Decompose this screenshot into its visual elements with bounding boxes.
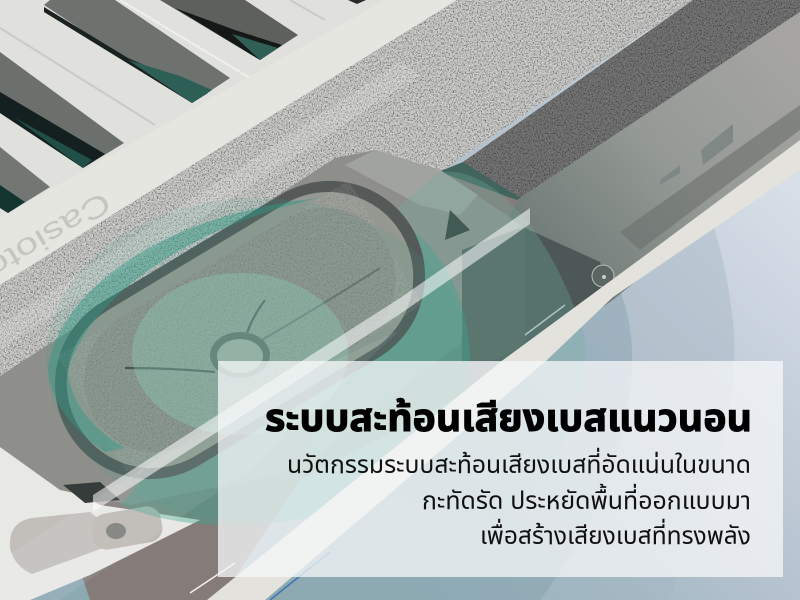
keyboard keys area <box>0 0 400 250</box>
body text <box>287 447 751 550</box>
teal corner behind frame <box>438 162 530 232</box>
key slot: small top-right slot <box>348 0 366 4</box>
white base plate <box>0 447 200 600</box>
vent: small <box>660 165 680 185</box>
vent: large <box>701 124 733 165</box>
frame notch <box>445 210 470 240</box>
body text: เพื่อสร้างเสียงเบสที่ทรงพลัง <box>480 518 751 550</box>
key slot: top-left slot <box>44 0 230 103</box>
sound ring: middle, behind driver <box>120 198 470 526</box>
screw <box>592 265 614 287</box>
housing right of speaker <box>455 12 800 372</box>
frame notch lower left <box>63 482 120 503</box>
ring: inner <box>132 273 348 435</box>
dark grille section <box>463 0 800 198</box>
cream front edge band <box>190 140 800 600</box>
key slot: left slot <box>0 52 124 168</box>
ring: middle tint <box>46 198 470 522</box>
frame side wall <box>462 226 525 362</box>
body text: กะทัดรัด ประหยัดพื้นที่ออกแบบมา <box>422 483 751 515</box>
ring: middle, left edge <box>48 198 320 452</box>
mount hole <box>89 504 165 552</box>
sound ring: outer, behind driver <box>300 172 586 520</box>
rubber ring <box>35 160 445 500</box>
key slot: bottom-left slot <box>0 147 50 213</box>
cone <box>57 181 423 479</box>
key slot: top-middle slot <box>160 0 298 60</box>
body text: นวัตกรรมระบบสะท้อนเสียงเบสที่อัดแน่นในขนาด <box>287 447 751 479</box>
rounded foot <box>10 512 125 574</box>
body base behind speaker <box>50 172 613 600</box>
cone ridges <box>125 268 380 372</box>
sound wave rings over driver <box>46 198 470 522</box>
title: ระบบสะท้อนเสียงเบสแนวนอน <box>265 398 752 440</box>
keyboard lip <box>0 0 457 285</box>
text panel <box>218 361 783 577</box>
dark housing base <box>455 228 613 362</box>
speaker frame <box>0 150 525 552</box>
dust cap <box>210 332 270 378</box>
speaker driver <box>20 146 460 514</box>
translucent glass strip <box>0 208 530 600</box>
key grooves <box>0 0 325 125</box>
outer surround <box>20 146 460 514</box>
housing ledge <box>620 105 800 250</box>
speaker grille fabric <box>0 0 693 376</box>
